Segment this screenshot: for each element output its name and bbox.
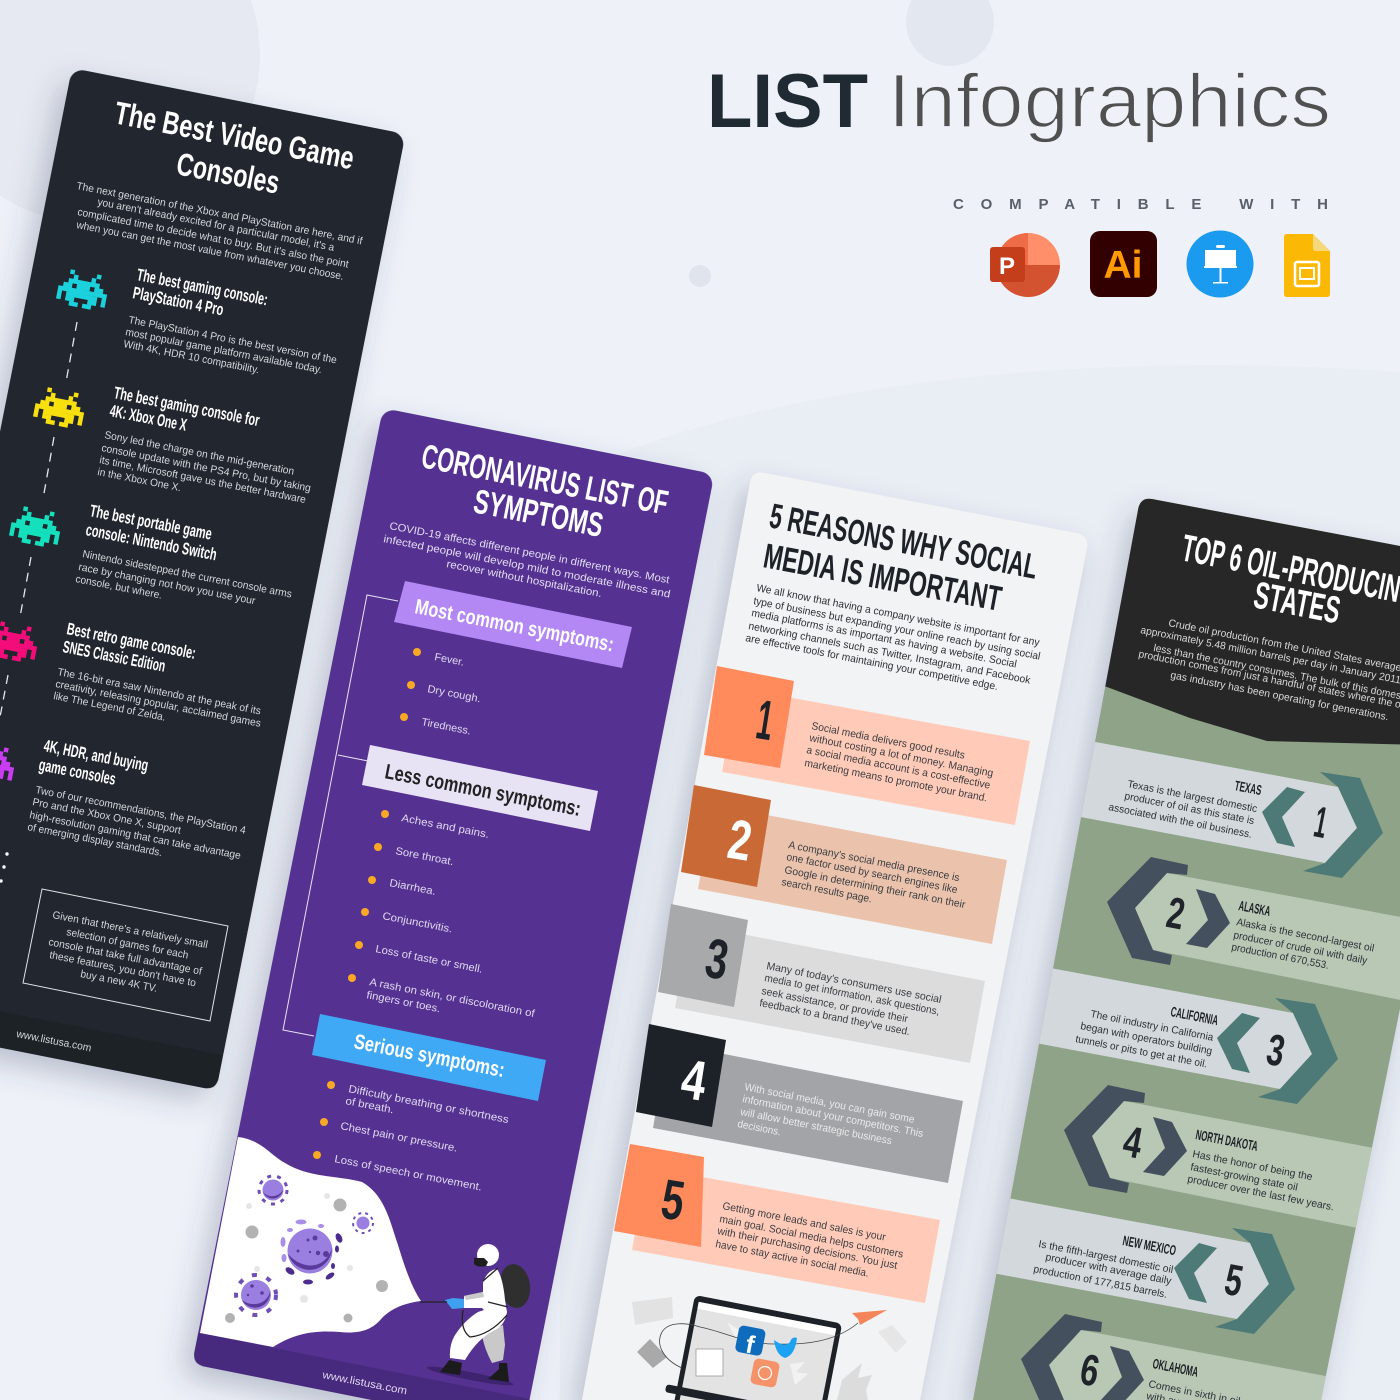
row: Oklahoma: OKLAHOMA [1151, 1355, 1200, 1380]
console item 4: Best retro game console: [65, 619, 197, 663]
intro text [74, 180, 363, 283]
row: New Mexico: Is the fifth-largest domestic oil [1037, 1239, 1174, 1276]
icon: PowerPoint [990, 233, 1060, 297]
reason 4: decisions. [736, 1118, 782, 1138]
console item 3 [74, 501, 293, 607]
console item 1: The PlayStation 4 Pro is the best version of the [127, 314, 338, 366]
console item 1: most popular game platform available today. [124, 326, 323, 376]
console item 1 [122, 265, 338, 376]
list: less common: Conjunctivitis. [381, 910, 453, 935]
intro text: infected people will develop mild to moderate illness and [382, 533, 671, 601]
intro text: less than the country consumes. The bulk of this domes [1152, 643, 1400, 702]
reason 3: seek assistance, or provide their [760, 985, 909, 1025]
console item 2: console update with the PS4 Pro, but by taking [100, 442, 312, 495]
row: Texas: 1 [1310, 798, 1331, 848]
card heading: STATES [1250, 575, 1344, 632]
reason 1: Social media delivers good results [810, 720, 966, 762]
card heading: MEDIA IS IMPORTANT [761, 537, 1005, 619]
card heading: SYMPTOMS [470, 483, 606, 545]
illustration: laptop with social icons [632, 1293, 907, 1400]
band: serious symptoms [312, 1014, 546, 1101]
console item 2: The best gaming console for [112, 383, 261, 430]
row: California: CALIFORNIA [1169, 1003, 1220, 1028]
console item 5: high-resolution gaming that can take advantage [28, 809, 242, 862]
list: less common: Loss of taste or smell. [374, 943, 484, 976]
intro text: media platforms is as important as having a website. Social [750, 607, 1018, 670]
card heading: Consoles [174, 146, 283, 201]
compatible with label: COMPATIBLE WITH [953, 196, 1328, 213]
console item 4: The 16-bit era saw Nintendo at the peak of its [56, 666, 262, 717]
reason 2 [681, 785, 1007, 944]
panel: video game consoles [0, 68, 406, 1090]
row: Alaska: production of 670,553. [1230, 942, 1330, 972]
intro text: recover without hospitalization. [445, 558, 603, 600]
reason 5: have to stay active in social media. [714, 1238, 870, 1280]
console item 5 [26, 736, 247, 862]
intro text: Crude oil production from the United States average [1167, 618, 1400, 674]
reason 3 [658, 904, 985, 1063]
intro text: are effective tools for maintaining your competitive edge. [744, 632, 999, 693]
dashed connector [0, 322, 77, 717]
footer url: www.listusa.com [14, 1028, 92, 1054]
intro text: when you can get the most value from whatever you choose. [74, 219, 345, 283]
icon: PowerPoint: P [999, 253, 1015, 280]
console item 1: The best gaming console: [135, 265, 269, 309]
intro text [1137, 618, 1400, 723]
intro text: complicated time to decide what to buy. But it's also the point [76, 206, 350, 271]
icon: large virus [280, 1220, 344, 1284]
icon: cyan invader [55, 268, 111, 312]
row: Texas: producer of oil as this state is [1123, 791, 1255, 827]
intro text: COVID-19 affects different people in different ways. Most [388, 520, 671, 586]
callout box: console that take full advantage of [47, 936, 203, 978]
list: less common: Aches and pains. [400, 812, 490, 841]
console item 2: its time, Microsoft gave us the better hardware [98, 454, 307, 506]
console item 1: With 4K, HDR 10 compatibility. [122, 338, 260, 376]
card background [973, 499, 1400, 1400]
list: serious: Difficulty breathing or shortness [347, 1083, 510, 1126]
reason 4: 4 [677, 1047, 711, 1113]
intro text [744, 582, 1041, 693]
row: Oklahoma: 6 [1076, 1345, 1103, 1397]
intro text: you aren't already excited for a particular model, it's a [96, 196, 335, 254]
icon: Keynote [1186, 230, 1254, 298]
panel: oil-producing states [973, 470, 1400, 1400]
reason 5: Getting more leads and sales is your [721, 1200, 887, 1244]
intro text: The next generation of the Xbox and PlayStation are here, and if [75, 180, 363, 247]
card heading [761, 497, 1041, 619]
icon: Google Slides [1284, 234, 1330, 297]
intro text: networking channels such as Twitter, Instagram, and Facebook [747, 620, 1032, 687]
intro text: approximately 5.48 million barrels per day in January 2011 [1139, 625, 1400, 687]
list: most common: Dry cough. [426, 683, 482, 705]
console item 4 [52, 619, 262, 730]
card background [0, 68, 406, 1090]
reason 5: 5 [657, 1167, 689, 1233]
reason 3: media to get information, ask questions, [763, 972, 940, 1018]
list: less common: A rash on skin, or discoloration of [368, 976, 536, 1020]
row: New Mexico: NEW MEXICO [1121, 1232, 1178, 1258]
console item 5: Two of our recommendations, the PlayStation 4 [34, 784, 247, 837]
footer url: www.listusa.com [320, 1369, 408, 1397]
row: California [1025, 967, 1338, 1104]
reason 5: with their purchasing decisions. You just [715, 1225, 898, 1272]
console item 4: like The Legend of Zelda. [52, 690, 167, 724]
callout box: these features, you don't have to [48, 949, 197, 989]
row: New Mexico: 5 [1221, 1255, 1247, 1306]
title: LIST [707, 59, 868, 144]
console item 5: Pro and the Xbox One X, support [31, 796, 182, 837]
row: Texas [1070, 741, 1383, 878]
figure: sprayer in protective suit [420, 1244, 533, 1388]
console item 5: game consoles [37, 755, 117, 789]
icon: purple invader [0, 740, 18, 785]
console item 4: SNES Classic Edition [61, 637, 167, 676]
console item 5: 4K, HDR, and buying [42, 736, 150, 775]
card background [192, 408, 714, 1400]
console item 3: The best portable game [88, 501, 214, 544]
reason 2: 2 [724, 807, 756, 873]
list: less common: Sore throat. [394, 845, 455, 868]
reason 2: A company's social media presence is [787, 839, 961, 884]
row: North Dakota [1064, 1085, 1372, 1228]
reason 1: 1 [752, 687, 778, 752]
icon: teal invader [8, 504, 64, 549]
intro text: production comes from just a handful of states where the o [1137, 649, 1400, 711]
band: most common symptoms [394, 581, 632, 668]
list: serious: Loss of speech or movement. [333, 1153, 483, 1194]
reason 2: search results page. [780, 876, 873, 905]
reason 3: 3 [701, 926, 733, 992]
card heading: 5 REASONS WHY SOCIAL [766, 497, 1041, 587]
spray cloud with viruses [200, 1137, 421, 1347]
reason 1: marketing means to promote your brand. [803, 757, 988, 804]
illustration: laptop with social icons: f [743, 1331, 757, 1360]
console item 3: race by changing not how you use your [77, 561, 257, 607]
band: less common symptoms [362, 745, 598, 831]
icon: pink invader [0, 620, 41, 664]
row: New Mexico: production of 177,815 barrels. [1032, 1264, 1168, 1301]
reason 2: one factor used by search engines like [785, 851, 959, 896]
list: serious [313, 1081, 510, 1194]
console item 2: Sony led the charge on the mid-generation [103, 429, 295, 478]
console item 4: creativity, releasing popular, acclaimed games [54, 678, 262, 730]
reason 3: feedback to a brand they've used. [758, 997, 911, 1038]
row: North Dakota: Has the honor of being the [1191, 1149, 1313, 1183]
title [707, 59, 1331, 144]
reason 4: will allow better strategic business [738, 1106, 893, 1147]
list: most common: Fever. [433, 651, 465, 669]
row: Oklahoma [1021, 1314, 1326, 1400]
row: California: began with operators building [1079, 1021, 1213, 1058]
reason 4 [636, 1024, 963, 1183]
title: Infographics [888, 59, 1331, 144]
icon: Illustrator: Ai [1104, 244, 1142, 287]
callout box: buy a new 4K TV. [79, 968, 158, 995]
row: North Dakota: producer over the last few years. [1186, 1174, 1335, 1213]
callout box: selection of games for each [65, 926, 190, 962]
row: Alaska [1107, 857, 1400, 1010]
console item 3: console, but where. [74, 573, 163, 602]
intro text: type of business but expanding your online reach by using social [752, 595, 1041, 663]
dark header [1105, 498, 1400, 744]
list: serious: Chest pain or pressure. [339, 1120, 459, 1155]
card background [582, 472, 1087, 1400]
reason 1: without costing a lot of money. Managing [807, 732, 994, 780]
row: Texas: associated with the oil business. [1107, 802, 1253, 841]
list: most common [400, 648, 482, 737]
row: Alaska: producer of crude oil with daily [1232, 930, 1369, 967]
row: Alaska: 2 [1163, 888, 1189, 939]
console item 3: Nintendo sidestepped the current console arms [81, 548, 293, 601]
row: North Dakota: fastest-growing state oil [1189, 1162, 1299, 1194]
row: New Mexico: producer with average daily [1044, 1252, 1173, 1288]
band: less common symptoms: Less common symptoms: [383, 760, 583, 821]
console item 3: console: Nintendo Switch [84, 520, 218, 564]
row: California: The oil industry in California [1089, 1009, 1214, 1044]
card heading: The Best Video Game [112, 95, 357, 176]
console item 1: PlayStation 4 Pro [131, 283, 225, 319]
console item 2: 4K: Xbox One X [108, 401, 189, 435]
panel: coronavirus symptoms [192, 408, 714, 1400]
list: serious: of breath. [344, 1095, 395, 1116]
reason 1 [704, 666, 1030, 825]
icon: small viruses [236, 1176, 373, 1315]
reason 5: main goal. Social media helps customers [718, 1213, 904, 1261]
list: most common: Tiredness. [420, 716, 472, 737]
console item 2: in the Xbox One X. [96, 466, 182, 494]
list: less common: fingers or toes. [365, 989, 441, 1015]
icon: yellow invader [32, 386, 88, 430]
row: Alaska: ALASKA [1237, 897, 1272, 919]
dotted connector [0, 852, 9, 883]
reason 3: Many of today's consumers use social [765, 960, 942, 1006]
reason 2: Google in determining their rank on their [783, 864, 967, 911]
row: New Mexico [982, 1197, 1295, 1334]
intro text: We all know that having a company website is important for any [755, 582, 1041, 649]
row: Alaska: Alaska is the second-largest oil [1235, 917, 1375, 955]
callout box [23, 889, 228, 1021]
band: most common symptoms: Most common symptoms: [413, 595, 616, 656]
bracket lines [283, 595, 398, 1036]
row: North Dakota: 4 [1119, 1117, 1147, 1169]
reason 4: With social media, you can gain some [743, 1081, 916, 1126]
row: California: tunnels or pits to get at the oil. [1074, 1034, 1208, 1071]
intro text: gas industry has been operating for generations. [1169, 670, 1389, 723]
console item 5: of emerging display standards. [26, 821, 163, 859]
row: Texas: Texas is the largest domestic [1126, 779, 1258, 815]
callout box: Given that there's a relatively small [51, 909, 209, 951]
card heading: CORONAVIRUS LIST OF [418, 438, 671, 523]
band: serious symptoms: Serious symptoms: [352, 1030, 507, 1082]
reason 1: a social media account is a cost-effective [805, 744, 991, 792]
row: North Dakota: NORTH DAKOTA [1194, 1126, 1259, 1154]
icon: Illustrator [1090, 231, 1157, 297]
console item 2 [96, 383, 312, 506]
list: less common [348, 810, 536, 1020]
row: Texas: TEXAS [1233, 777, 1263, 798]
reason 5 [614, 1144, 940, 1303]
list: less common: Diarrhea. [388, 877, 437, 898]
row: California: 3 [1263, 1025, 1289, 1076]
card heading [418, 438, 671, 545]
reason 4: information about your competitors. This [741, 1093, 924, 1140]
panel: social media reasons [582, 472, 1087, 1400]
